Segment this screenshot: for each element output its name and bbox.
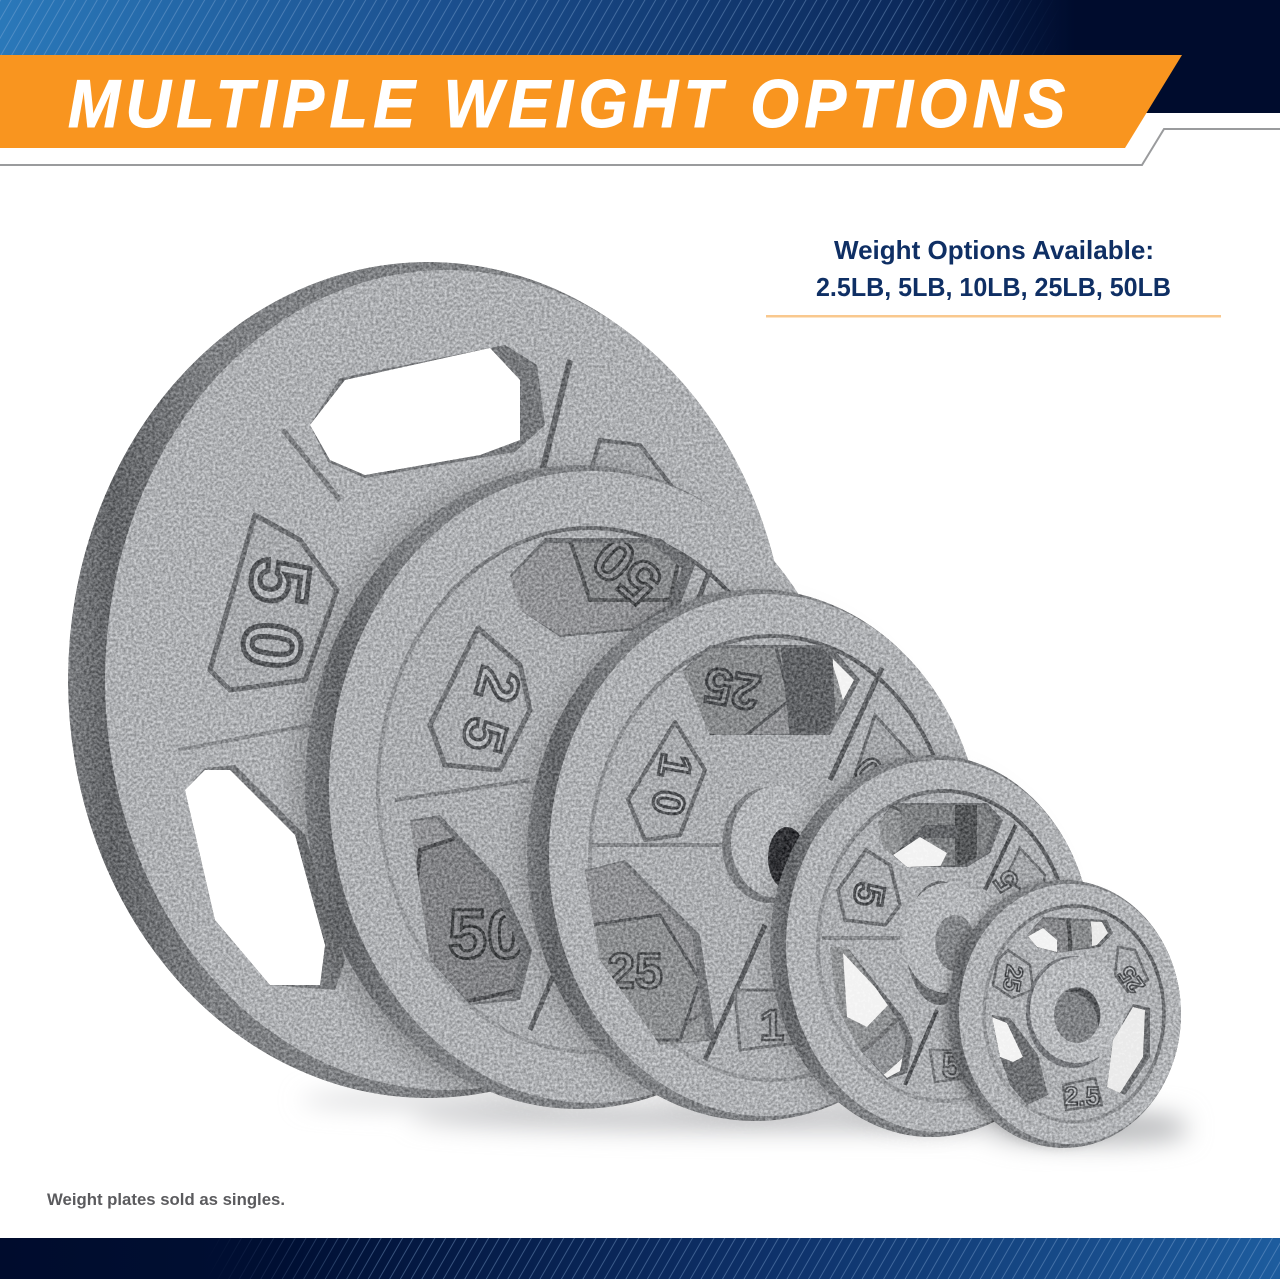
- plate: 25 lb: [305, 465, 853, 1109]
- footer band: [0, 1238, 1280, 1279]
- plate: 5 lb: 5: [844, 879, 894, 910]
- plate: 10 lb: 10: [642, 750, 701, 819]
- footnote: Weight plates sold as singles.: [47, 1191, 285, 1209]
- plate: 2.5 lb: [947, 880, 1181, 1148]
- plate: 50 lb: [68, 262, 789, 1098]
- weight options callout: Weight Options Available:: [834, 235, 1154, 265]
- floor shadow: [300, 1092, 1190, 1145]
- plate: 25 lb: 25: [449, 661, 533, 759]
- plate: 50 lb: 50: [223, 553, 327, 673]
- shadow: 10 lb plate: [519, 590, 971, 1126]
- plate: 50 lb: 50: [580, 524, 674, 618]
- plate: 5 lb: [770, 755, 1092, 1137]
- plate: 25 lb: 25: [700, 656, 764, 721]
- plate: 5 lb: 5: [942, 1045, 962, 1086]
- shadow: 5 lb plate: [763, 755, 1083, 1141]
- plate: 25 lb: 25: [607, 943, 663, 999]
- plate: 5 lb: 5: [986, 864, 1026, 899]
- plate: 2.5 lb: 2.5: [1064, 1081, 1100, 1111]
- plate: 10 lb: 10: [846, 748, 905, 807]
- grey accent line under header: [0, 129, 1280, 165]
- weight options callout: [766, 235, 1221, 318]
- plate: 2.5 lb: 25: [1113, 961, 1151, 998]
- plate: 50 lb: 50: [448, 895, 526, 973]
- plate: 10 lb: 1: [760, 1001, 784, 1050]
- plate: 10 lb: [527, 589, 1005, 1121]
- plate: 2.5 lb: 25: [997, 963, 1028, 994]
- weight options callout: 2.5LB, 5LB, 10LB, 25LB, 50LB: [816, 272, 1171, 302]
- shadow: 25 lb plate: [286, 460, 682, 1109]
- shadow: 2.5 lb plate: [939, 878, 1145, 1150]
- title banner: [0, 55, 1182, 148]
- weight plates product photo: [68, 262, 1181, 1151]
- header band: [0, 0, 1280, 113]
- title banner: MULTIPLE WEIGHT OPTIONS: [68, 66, 1065, 142]
